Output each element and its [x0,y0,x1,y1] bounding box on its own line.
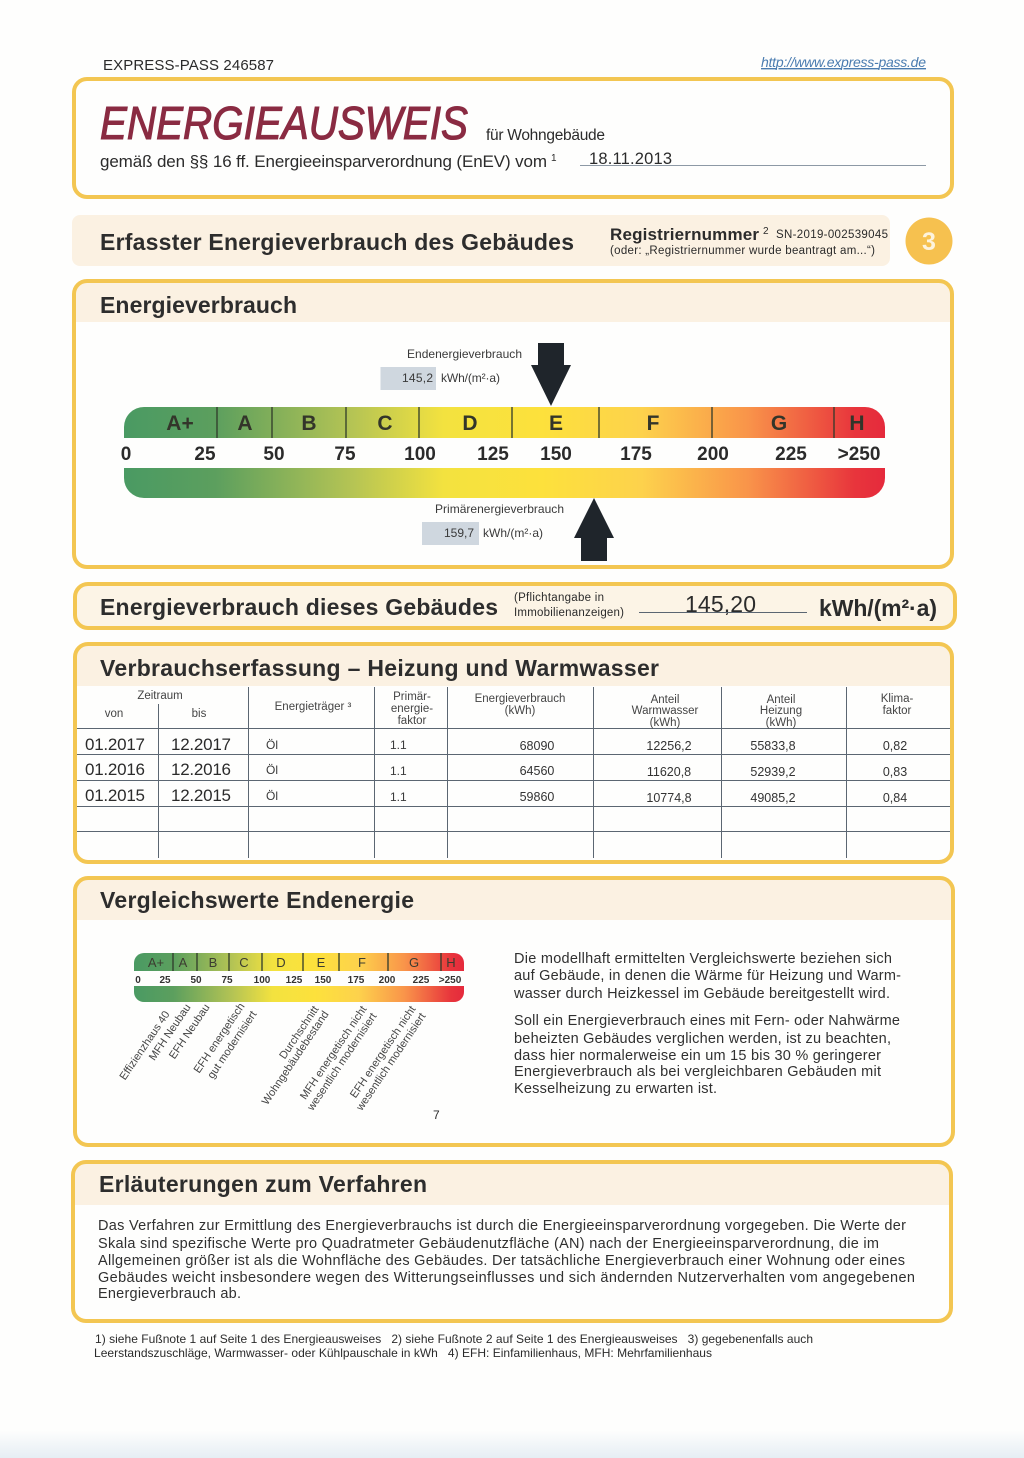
rotated comparison labels: EFH energetisch [192,1001,247,1076]
rotated comparison labels: EFH Neubau [167,1002,212,1061]
small scale numbers: 175 [348,975,365,986]
footnotes: Leerstandszuschläge, Warmwasser- oder Kühlpauschale in kWh 4) EFH: Einfamilienhaus, MFH: Mehrfamilienhaus [94,1346,712,1360]
table header: (kWh) [650,717,680,729]
footnote mark 2: 2 [763,226,769,237]
explanatory text 2 [514,1013,900,1097]
explanatory text 1: wasser durch Heizkessel im Gebäude bereitgestellt wird. [513,986,890,1002]
table row 2015: 12.2015 [171,786,231,805]
table header [105,690,913,729]
table row 2017: 1.1 [390,738,407,752]
explanation body: Gebäudes weicht insbesondere wegen des Witterungseinflusses und sich ändernden Nutzerverhalten vom angegebenen [98,1270,915,1286]
panel: Energieverbrauch [74,281,952,567]
small class letters: G [409,955,419,970]
primary energy value: kWh/(m²·a) [483,526,543,540]
explanatory text 1 [513,951,901,1002]
explanation body: Skala sind spezifische Werte pro Quadratmeter Gebäudenutzfläche (AN) nach der Energieeinsparverordnung, die im [98,1236,879,1252]
table row 2015: 10774,8 [646,791,692,805]
final energy value [380,367,500,390]
table row 2017: 12.2017 [171,735,231,754]
title: Energieausweis: ENERGIEAUSWEIS [100,97,468,149]
table row 2017: 01.2017 [85,735,145,754]
table row 2017: 68090 [520,739,554,753]
rotated comparison labels: Durchschnitt [277,1004,321,1061]
rotated comparison labels: Effizienzhaus 40 [118,1009,172,1082]
table row 2017 [85,735,907,754]
date: 18.11.2013 [589,150,672,168]
table header: (kWh) [505,705,535,717]
small class letters: A+ [148,955,164,970]
small scale numbers: 0 [135,975,141,986]
small scale numbers: 150 [315,975,332,986]
scale numbers: 200 [697,444,729,465]
panel: Energieverbrauch dieses Gebäudes [75,584,955,628]
table row 2016: 01.2016 [85,760,145,779]
small upper bar [134,953,464,971]
value underline [639,612,807,614]
upper scale bar [124,407,885,438]
scale numbers: >250 [838,444,880,465]
panel: Erläuterungen zum Verfahren [73,1162,951,1321]
heading: Erläuterungen zum Verfahren [99,1171,427,1197]
table header: Zeitraum [137,690,183,702]
page reference number: EXPRESS-PASS 246587 [103,57,274,74]
table grid [75,687,952,858]
explanation body: Energieverbrauch ab. [98,1286,241,1302]
explanatory text 2: Kesselheizung zu erwarten ist. [514,1081,717,1097]
class letters: D [462,412,478,435]
heading: Energieverbrauch [100,292,297,318]
class letters: B [301,412,317,435]
scale numbers: 150 [540,444,572,465]
rotated comparison labels: gut modernisiert [205,1009,259,1081]
table row 2016: Öl [266,763,278,777]
class letters [166,412,865,435]
scale numbers: 100 [404,444,436,465]
table row 2017: 12256,2 [646,739,692,753]
table header: Klima- [881,693,913,705]
rotated comparison labels: wesentlich modernisiert [354,1011,428,1114]
scale numbers: 75 [334,444,356,465]
scale numbers: 25 [194,444,216,465]
website link: http://www.express-pass.de [761,54,926,70]
table row 2015: 59860 [520,790,554,804]
explanatory text 2: Soll ein Energieverbrauch eines mit Fern- oder Nahwärme [514,1013,900,1029]
footnote mark 1: 1 [551,153,557,164]
small class letters: F [358,955,366,970]
registration note: (oder: „Registriernummer wurde beantragt am...“) [610,245,875,257]
table row 2015: 49085,2 [750,791,796,805]
panel: Vergleichswerte Endenergie [75,878,953,1145]
heading: Energieverbrauch dieses Gebäudes [100,594,498,620]
subtitle: für Wohngebäude [486,127,605,144]
rotated comparison labels: Wohngebäudebestand [260,1009,331,1107]
small scale numbers: 125 [286,975,303,986]
rotated comparison labels: EFH energetisch nicht [348,1004,418,1100]
table row 2015: 0,84 [883,791,907,805]
scale numbers: 0 [121,444,131,465]
registration label: Registriernummer [610,225,759,244]
table header: energie- [391,703,433,715]
primary energy value: 159,7 [444,526,474,540]
rotated comparison labels: MFH Neubau [147,1002,193,1063]
table header: von [105,708,123,720]
small class letters: H [446,955,456,970]
final energy value: kWh/(m²·a) [441,371,500,385]
class letters: C [377,412,393,435]
primary energy value [422,522,543,545]
table row 2016: 11620,8 [647,765,691,779]
explanation body: Allgemeinen größer ist als die Wohnfläche des Gebäudes. Der tatsächliche Energieverbrauch einer Wohnung oder eines [98,1253,905,1269]
table header: faktor [398,715,427,727]
small lower bar [134,986,464,1002]
table row 2015: 1.1 [390,790,407,804]
unit: kWh/(m²·a) [819,595,937,621]
mandatory note: (Pflichtangabe in [514,592,604,604]
scale numbers: 175 [620,444,652,465]
class letters: A [237,412,253,435]
explanatory text 1: Die modellhaft ermittelten Vergleichswerte beziehen sich [514,951,892,967]
badge: page 3 [906,218,952,264]
table row 2016: 1.1 [390,764,407,778]
explanatory text 2: beheizten Gebäudes verglichen werden, ist zu beachten, [514,1031,891,1047]
small energy scale [134,953,464,1002]
class letters: G [771,412,787,435]
table header: Primär- [393,691,431,703]
table row 2015 [85,786,907,805]
table row 2016: 12.2016 [171,760,231,779]
class letters: H [849,412,865,435]
table header: Energieverbrauch [475,693,565,705]
primary energy label: Primärenergieverbrauch [435,502,564,516]
table row 2017: 0,82 [883,739,907,753]
rotated comparison labels [118,1001,428,1114]
value: 145,20 [685,591,756,617]
table row 2016: 64560 [520,764,554,778]
registration number: SN-2019-002539045 [776,229,888,241]
table header: Anteil [767,694,795,706]
table header: Anteil [651,694,679,706]
small class letters: A [179,955,188,970]
date underline [580,164,926,166]
class letters: F [647,412,660,435]
small scale numbers: 200 [379,975,396,986]
heading: Vergleichswerte Endenergie [100,887,414,913]
table header: (kWh) [766,717,796,729]
small scale numbers: >250 [439,975,462,986]
final energy value: 145,2 [402,371,433,385]
table row 2015: Öl [266,789,278,803]
class letters: A+ [166,412,194,435]
table header: Heizung [760,705,802,717]
explanation body [98,1218,915,1302]
small scale numbers: 25 [159,975,171,986]
table row 2016 [85,760,907,779]
table row 2017: 55833,8 [750,739,796,753]
explanatory text 2: dass hier normalerweise ein um 15 bis 30 % geringerer [514,1048,881,1064]
table row 2016: 0,83 [883,765,907,779]
table header: bis [192,708,207,720]
small class letters [148,955,456,970]
scale numbers [121,444,880,465]
table header: Energieträger ³ [275,701,352,713]
table header: faktor [883,705,912,717]
small scale numbers: 50 [190,975,202,986]
lower scale bar [124,468,885,498]
small scale numbers: 225 [413,975,430,986]
table row 2015: 01.2015 [85,786,145,805]
small scale numbers [135,975,462,986]
footnote mark 7: 7 [433,1108,440,1122]
panel: title [74,79,952,197]
scale numbers: 50 [263,444,285,465]
scale numbers: 225 [775,444,807,465]
explanation body: Das Verfahren zur Ermittlung des Energieverbrauchs ist durch die Energieeinsparverordnung vorgegeben. Die Werte der [98,1218,906,1234]
footnotes [94,1332,813,1360]
small class letters: D [276,955,286,970]
small class letters: B [209,955,217,970]
small scale numbers: 100 [254,975,271,986]
arrow: primary energy marker [574,498,614,561]
mandatory note line 2: Immobilienanzeigen) [514,607,624,619]
table row 2017: Öl [266,738,278,752]
small class letters: C [239,955,249,970]
table row 2016: 52939,2 [750,765,796,779]
footnotes: 1) siehe Fußnote 1 auf Seite 1 des Energieausweises 2) siehe Fußnote 2 auf Seite 1 des Energieausweises 3) gegebenenfalls auch [95,1332,813,1346]
energy scale [121,407,885,498]
section header band [72,215,890,266]
rotated comparison labels: MFH energetisch nicht [298,1004,369,1102]
final energy label: Endenergieverbrauch [407,347,522,361]
small scale numbers: 75 [221,975,233,986]
legal reference: gemäß den §§ 16 ff. Energieeinsparverordnung (EnEV) vom [100,152,547,171]
class letters: E [549,412,563,435]
badge: page 3: 3 [922,228,936,256]
table header: Warmwasser [632,705,698,717]
arrow: final energy marker [531,343,571,406]
rotated comparison labels: wesentlich modernisiert [305,1011,379,1114]
explanatory text 1: auf Gebäude, in denen die Wärme für Heizung und Warm- [514,968,901,984]
section heading: Erfasster Energieverbrauch des Gebäudes [100,229,574,255]
explanatory text 2: Energieverbrauch als bei vergleichbaren Gebäuden mit [514,1064,881,1080]
scale numbers: 125 [477,444,509,465]
panel: Verbrauchserfassung [75,644,952,862]
small class letters: E [317,955,326,970]
heading: Verbrauchserfassung – Heizung und Warmwasser [100,655,659,681]
